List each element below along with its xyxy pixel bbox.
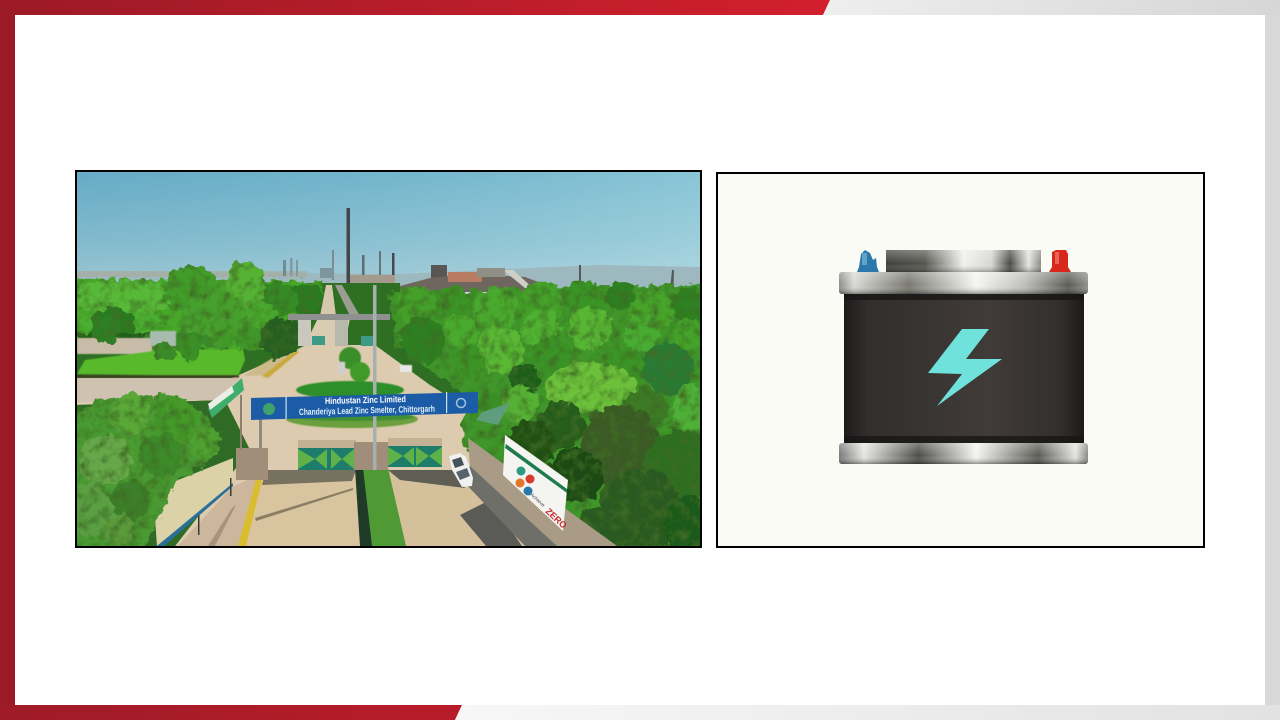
perimeter wall — [462, 438, 617, 546]
blue terminal — [857, 250, 879, 272]
roundabout island — [286, 347, 418, 428]
net zero billboard: Achieve — [529, 492, 546, 509]
tree canopy left background — [70, 261, 325, 350]
net zero billboard — [503, 435, 569, 531]
far gate canopy — [288, 314, 390, 346]
upper metal band — [839, 272, 1088, 294]
big foreground tree — [77, 390, 222, 546]
icon: lightning bolt — [928, 329, 1002, 406]
lawn and building — [77, 331, 299, 378]
icon: car battery — [839, 250, 1088, 464]
right forest canopy — [388, 280, 718, 556]
red terminal — [1049, 250, 1071, 272]
distant smelter plant — [283, 208, 674, 292]
entrance banner: Hindustan Zinc Limited — [325, 394, 406, 406]
white car — [449, 453, 473, 487]
entrance banner: Chanderiya Lead Zinc Smelter, Chittorgarh — [299, 404, 435, 417]
gate panels — [298, 438, 442, 470]
photo sky — [77, 172, 700, 302]
battery top cap — [886, 250, 1041, 273]
panel: aerial photo of the smelter entrance — [64, 170, 718, 556]
green shelter — [476, 403, 510, 425]
roadside hoarding wall — [153, 458, 233, 546]
net zero billboard: ZERO — [544, 506, 569, 531]
panel: battery illustration — [717, 173, 1204, 547]
gate walls and poles — [208, 285, 388, 480]
dark vegetation base — [77, 283, 466, 546]
median planting — [355, 468, 406, 546]
distant hills and ground haze — [77, 265, 700, 288]
lawn trees — [92, 316, 300, 361]
lower metal band — [839, 443, 1088, 464]
battery body — [844, 293, 1084, 443]
ground roads and plaza — [77, 285, 557, 546]
lower entrance road — [178, 470, 525, 546]
entrance banner — [251, 392, 478, 420]
